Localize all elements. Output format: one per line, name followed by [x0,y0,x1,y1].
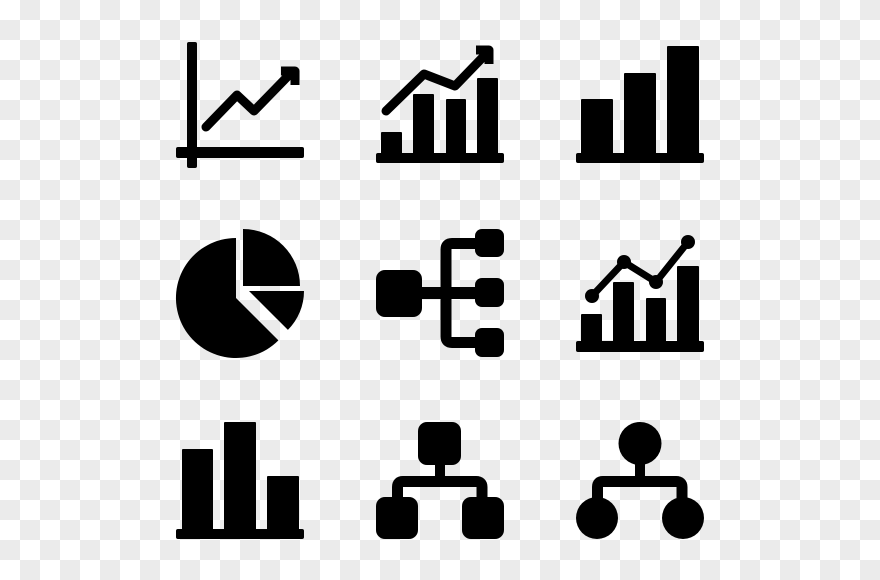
icon: org chart circles [576,422,704,539]
icon: bar chart three bars [176,422,304,539]
icon: bar chart with line [576,235,704,352]
icon: tree diagram [376,229,504,357]
icon: line chart with axes [176,42,304,168]
icon: org chart squares [376,422,504,539]
icon: ascending bar chart [576,46,704,163]
icon: pie chart [176,229,304,358]
icon: bar chart with trend arrow [376,50,504,163]
